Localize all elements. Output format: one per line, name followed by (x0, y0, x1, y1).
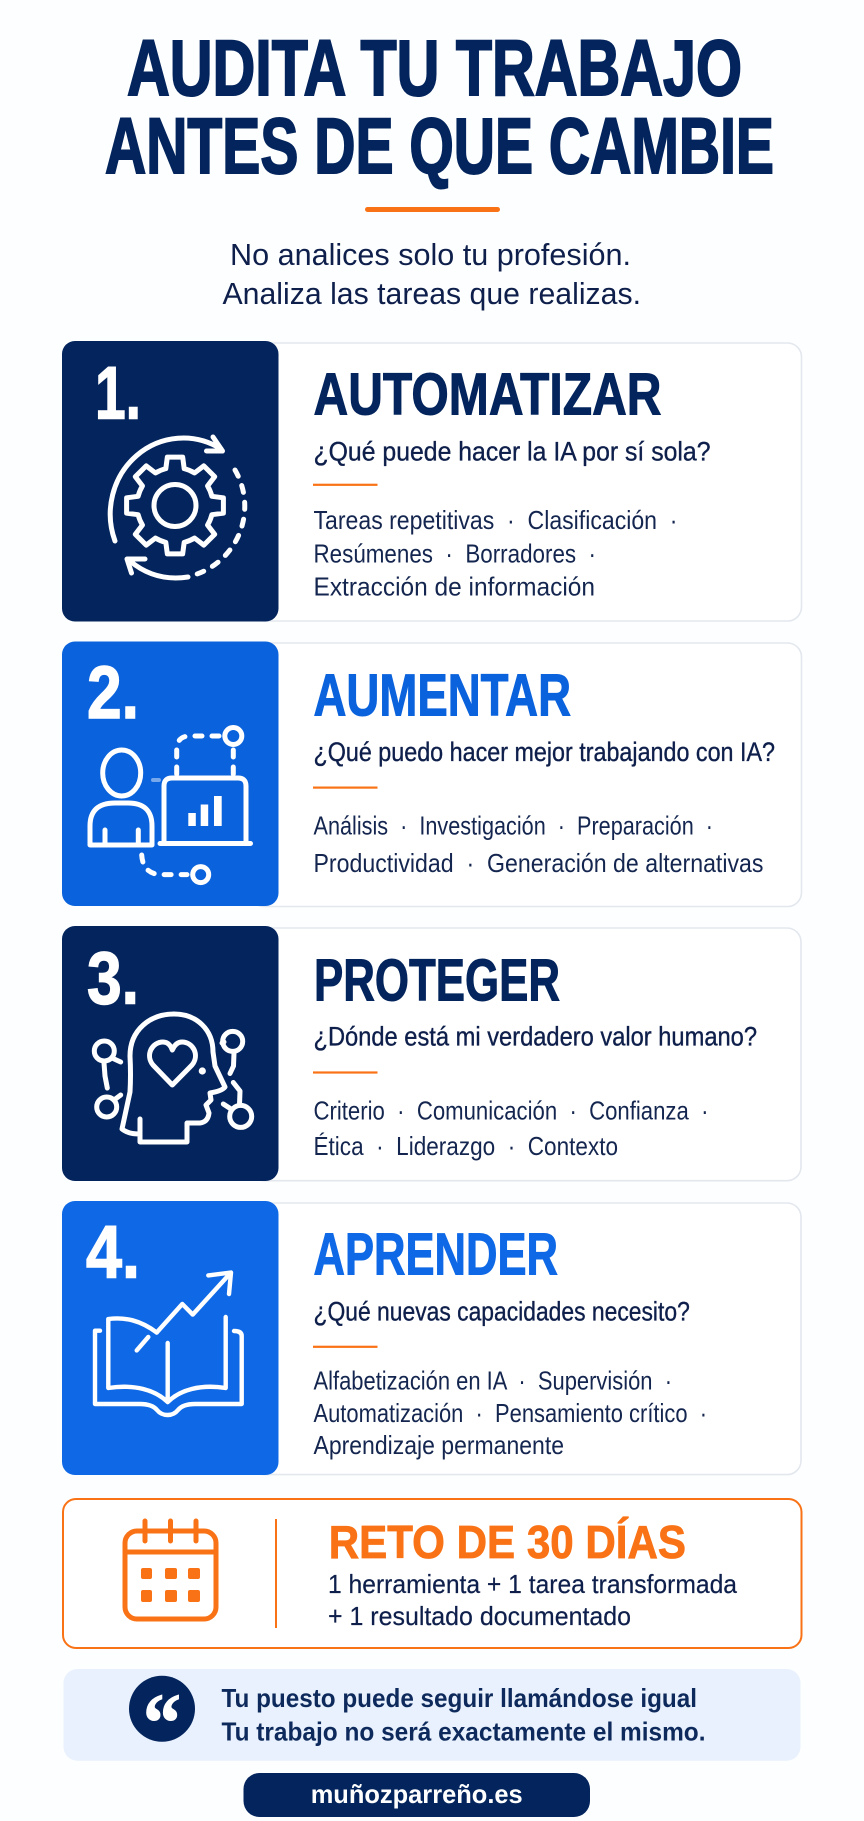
accent line (313, 484, 378, 486)
challenge text (328, 1569, 738, 1631)
task list (314, 505, 678, 602)
accent line (313, 1346, 378, 1348)
task list: Resúmenes · Borradores · (314, 538, 596, 568)
task list: Alfabetización en IA · Supervisión · (314, 1365, 672, 1395)
panel: number 2 (62, 642, 278, 906)
question: ¿Dónde está mi verdadero valor humano? (314, 1022, 757, 1052)
panel: quote (64, 1669, 800, 1770)
footer pill: website: muñozparreño.es (311, 1779, 523, 1809)
card 2: aumentar (62, 642, 802, 906)
card 4: aprender (62, 1201, 801, 1475)
task list (314, 1095, 708, 1161)
task list: Aprendizaje permanente (314, 1430, 564, 1460)
heading: APRENDER (314, 1222, 558, 1288)
accent line (313, 1071, 378, 1074)
icon: head with heart (94, 1014, 252, 1142)
number 3: 3. (87, 936, 139, 1020)
icon: gear with cycle arrows (110, 437, 245, 578)
heading: PROTEGER (314, 947, 560, 1013)
divider (275, 1519, 277, 1628)
challenge heading: RETO DE 30 DÍAS (329, 1516, 686, 1568)
panel: number 1 (62, 341, 278, 622)
panel: 30-day challenge (63, 1499, 802, 1648)
quote text (222, 1683, 706, 1747)
accent line (313, 786, 378, 789)
quote text: Tu puesto puede seguir llamándose igual (222, 1683, 697, 1713)
challenge text: 1 herramienta + 1 tarea transformada (328, 1569, 738, 1599)
subtitle (222, 237, 641, 311)
icon: person with laptop (90, 728, 250, 883)
card 3: proteger (62, 926, 801, 1181)
challenge text: + 1 resultado documentado (328, 1601, 631, 1631)
subtitle: No analices solo tu profesión. (230, 237, 631, 272)
title underline (365, 207, 500, 212)
task list (314, 1365, 707, 1460)
task list: Ética · Liderazgo · Contexto (314, 1131, 618, 1161)
footer pill: website (244, 1773, 590, 1817)
icon: book with rising arrow (95, 1272, 242, 1415)
panel: number 3 (62, 926, 278, 1181)
task list: Extracción de información (314, 572, 595, 602)
question: ¿Qué nuevas capacidades necesito? (314, 1297, 690, 1327)
card 1: automatizar (62, 341, 802, 622)
number 4: 4. (86, 1210, 140, 1294)
heading: AUTOMATIZAR (314, 362, 662, 428)
title (105, 23, 774, 190)
question: ¿Qué puedo hacer mejor trabajando con IA? (314, 737, 775, 767)
icon: quote mark: “ (143, 1677, 181, 1770)
number 2: 2. (87, 651, 139, 734)
icon: calendar (125, 1521, 216, 1619)
quote text: Tu trabajo no será exactamente el mismo. (222, 1717, 706, 1747)
task list: Automatización · Pensamiento crítico · (314, 1398, 707, 1428)
heading: AUMENTAR (314, 662, 571, 728)
task list: Tareas repetitivas · Clasificación · (314, 505, 678, 535)
task list (314, 810, 764, 878)
subtitle: Analiza las tareas que realizas. (222, 276, 641, 311)
task list: Criterio · Comunicación · Confianza · (314, 1095, 708, 1125)
panel: number 4 (62, 1201, 278, 1475)
task list: Análisis · Investigación · Preparación · (314, 810, 713, 840)
icon: quote mark (129, 1676, 195, 1770)
question: ¿Qué puede hacer la IA por sí sola? (314, 436, 710, 466)
task list: Productividad · Generación de alternativas (314, 848, 764, 878)
number 1: 1. (95, 352, 141, 434)
